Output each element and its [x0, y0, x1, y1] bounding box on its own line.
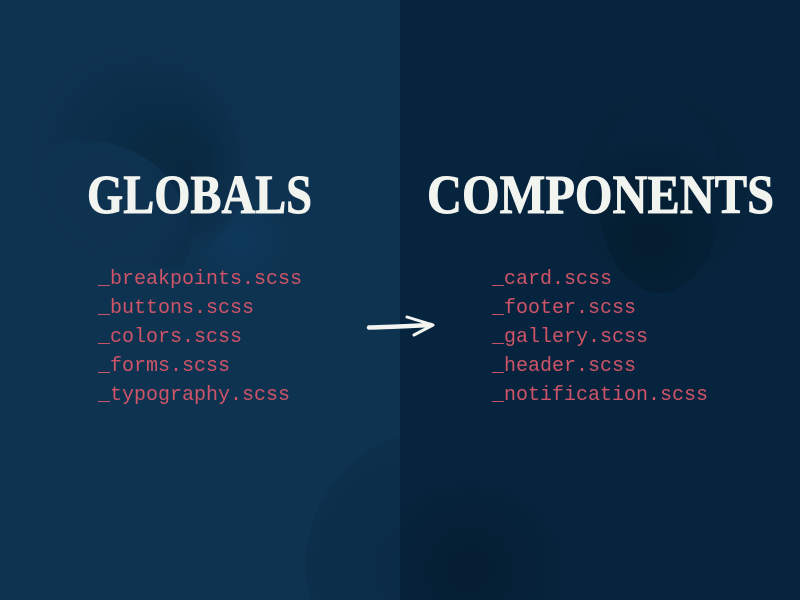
- text block: components file list: _header.scss: [491, 355, 636, 378]
- text block: globals file list: _buttons.scss: [97, 297, 254, 320]
- text block: globals file list: _forms.scss: [97, 355, 230, 378]
- text block: components file list: _gallery.scss: [491, 326, 648, 349]
- text block: components file list: _notification.scss: [491, 384, 708, 407]
- text block: globals file list: _colors.scss: [97, 326, 242, 349]
- heading: components: COMPONENTS: [427, 164, 774, 225]
- panel: globals background: [0, 0, 400, 600]
- arrow: globals to components: [369, 317, 433, 335]
- text block: globals file list: _breakpoints.scss: [97, 268, 302, 291]
- heading: globals: GLOBALS: [87, 164, 312, 225]
- text block: components file list: _card.scss: [491, 268, 612, 291]
- panel: components background: [400, 0, 800, 600]
- text block: components file list: [491, 268, 708, 407]
- text block: globals file list: [97, 268, 302, 407]
- text block: components file list: _footer.scss: [491, 297, 636, 320]
- text block: globals file list: _typography.scss: [97, 384, 290, 407]
